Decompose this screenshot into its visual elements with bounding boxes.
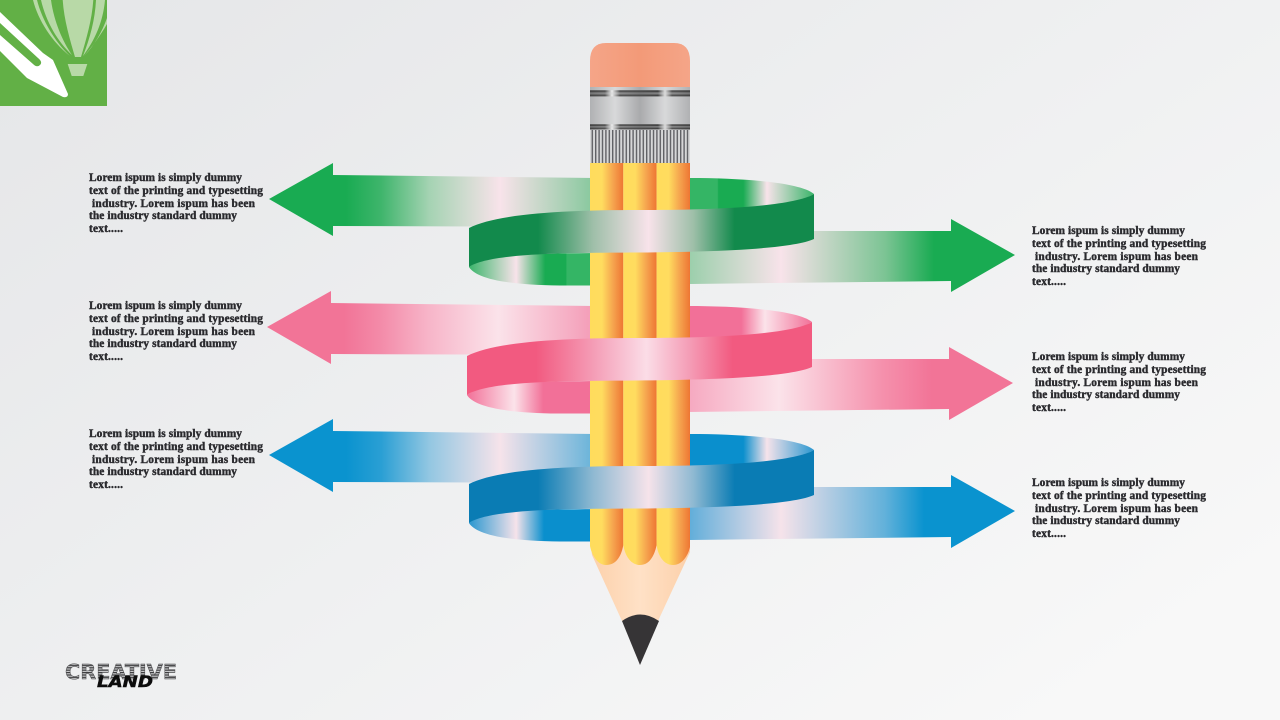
- text block: right blue: the industry standard dummy: [1032, 515, 1180, 527]
- arrow: pink right: [688, 347, 1013, 420]
- text block: left blue: [89, 428, 263, 491]
- text block: right green: industry. Lorem ispum has been: [1035, 251, 1199, 263]
- text block: right pink: [1032, 351, 1206, 414]
- arrow: pink left: [267, 291, 594, 364]
- logo: CorelDRAW badge: [0, 0, 107, 106]
- arrow: blue left: [269, 419, 596, 492]
- text block: right green: Lorem ispum is simply dummy: [1032, 225, 1185, 237]
- text block: left pink: [89, 300, 263, 363]
- ribbon: green rear top: [690, 178, 814, 211]
- logo: Creative Land wordmark: LAND: [97, 672, 153, 691]
- pencil ferrule: [590, 87, 690, 163]
- text block: left green: text of the printing and typesetting: [89, 185, 263, 197]
- ribbon: pink front band: [467, 322, 812, 395]
- text block: right pink: text of the printing and typesetting: [1032, 364, 1206, 376]
- text block: right blue: [1032, 477, 1206, 540]
- pencil eraser: [590, 43, 690, 87]
- arrow: green left: [269, 163, 596, 236]
- text block: left green: the industry standard dummy: [89, 210, 237, 222]
- text block: right blue: Lorem ispum is simply dummy: [1032, 477, 1185, 489]
- text block: right blue: text.....: [1032, 528, 1066, 540]
- text block: right green: text.....: [1032, 276, 1066, 288]
- ribbon: blue rear bottom: [469, 509, 596, 542]
- text block: left pink: Lorem ispum is simply dummy: [89, 300, 242, 312]
- text block: right pink: the industry standard dummy: [1032, 389, 1180, 401]
- text block: right blue: industry. Lorem ispum has been: [1035, 503, 1199, 515]
- text block: left green: industry. Lorem ispum has been: [92, 198, 256, 210]
- text block: left pink: the industry standard dummy: [89, 338, 237, 350]
- text block: right blue: text of the printing and typesetting: [1032, 490, 1206, 502]
- pink back layer: arrows and rear ribbon: [267, 291, 1013, 420]
- ribbon: green rear bottom: [469, 253, 596, 286]
- text block: left pink: text of the printing and typesetting: [89, 313, 263, 325]
- text block: right pink: industry. Lorem ispum has been: [1035, 377, 1199, 389]
- text block: left blue: text.....: [89, 479, 123, 491]
- text block: left blue: the industry standard dummy: [89, 466, 237, 478]
- text block: left blue: text of the printing and typesetting: [89, 441, 263, 453]
- pencil lead: [622, 614, 659, 665]
- blue back layer: arrows and rear ribbon: [269, 419, 1015, 548]
- arrow: blue right: [690, 475, 1015, 548]
- ribbon: green front band: [469, 194, 814, 267]
- ribbon: blue front band: [469, 450, 814, 523]
- text block: left green: text.....: [89, 223, 123, 235]
- pencil: [590, 43, 690, 665]
- green back layer: arrows and rear ribbon: [269, 163, 1015, 292]
- text block: right green: text of the printing and typesetting: [1032, 238, 1206, 250]
- text block: left pink: industry. Lorem ispum has been: [92, 326, 256, 338]
- arrow: green right: [690, 219, 1015, 292]
- text block: right green: the industry standard dummy: [1032, 263, 1180, 275]
- text block: left blue: industry. Lorem ispum has been: [92, 454, 256, 466]
- ribbon: pink rear top: [688, 306, 812, 339]
- text block: left green: [89, 172, 263, 235]
- ribbon: pink rear bottom: [467, 381, 594, 414]
- text block: left pink: text.....: [89, 351, 123, 363]
- text block: right pink: text.....: [1032, 402, 1066, 414]
- ribbon: blue rear top: [690, 434, 814, 467]
- pencil wood tip: [590, 540, 690, 621]
- text block: right green: [1032, 225, 1206, 288]
- logo: Creative Land wordmark: CREATIVE: [65, 660, 177, 684]
- text block: left blue: Lorem ispum is simply dummy: [89, 428, 242, 440]
- text block: right pink: Lorem ispum is simply dummy: [1032, 351, 1185, 363]
- text block: left green: Lorem ispum is simply dummy: [89, 172, 242, 184]
- pencil body columns: [590, 163, 690, 565]
